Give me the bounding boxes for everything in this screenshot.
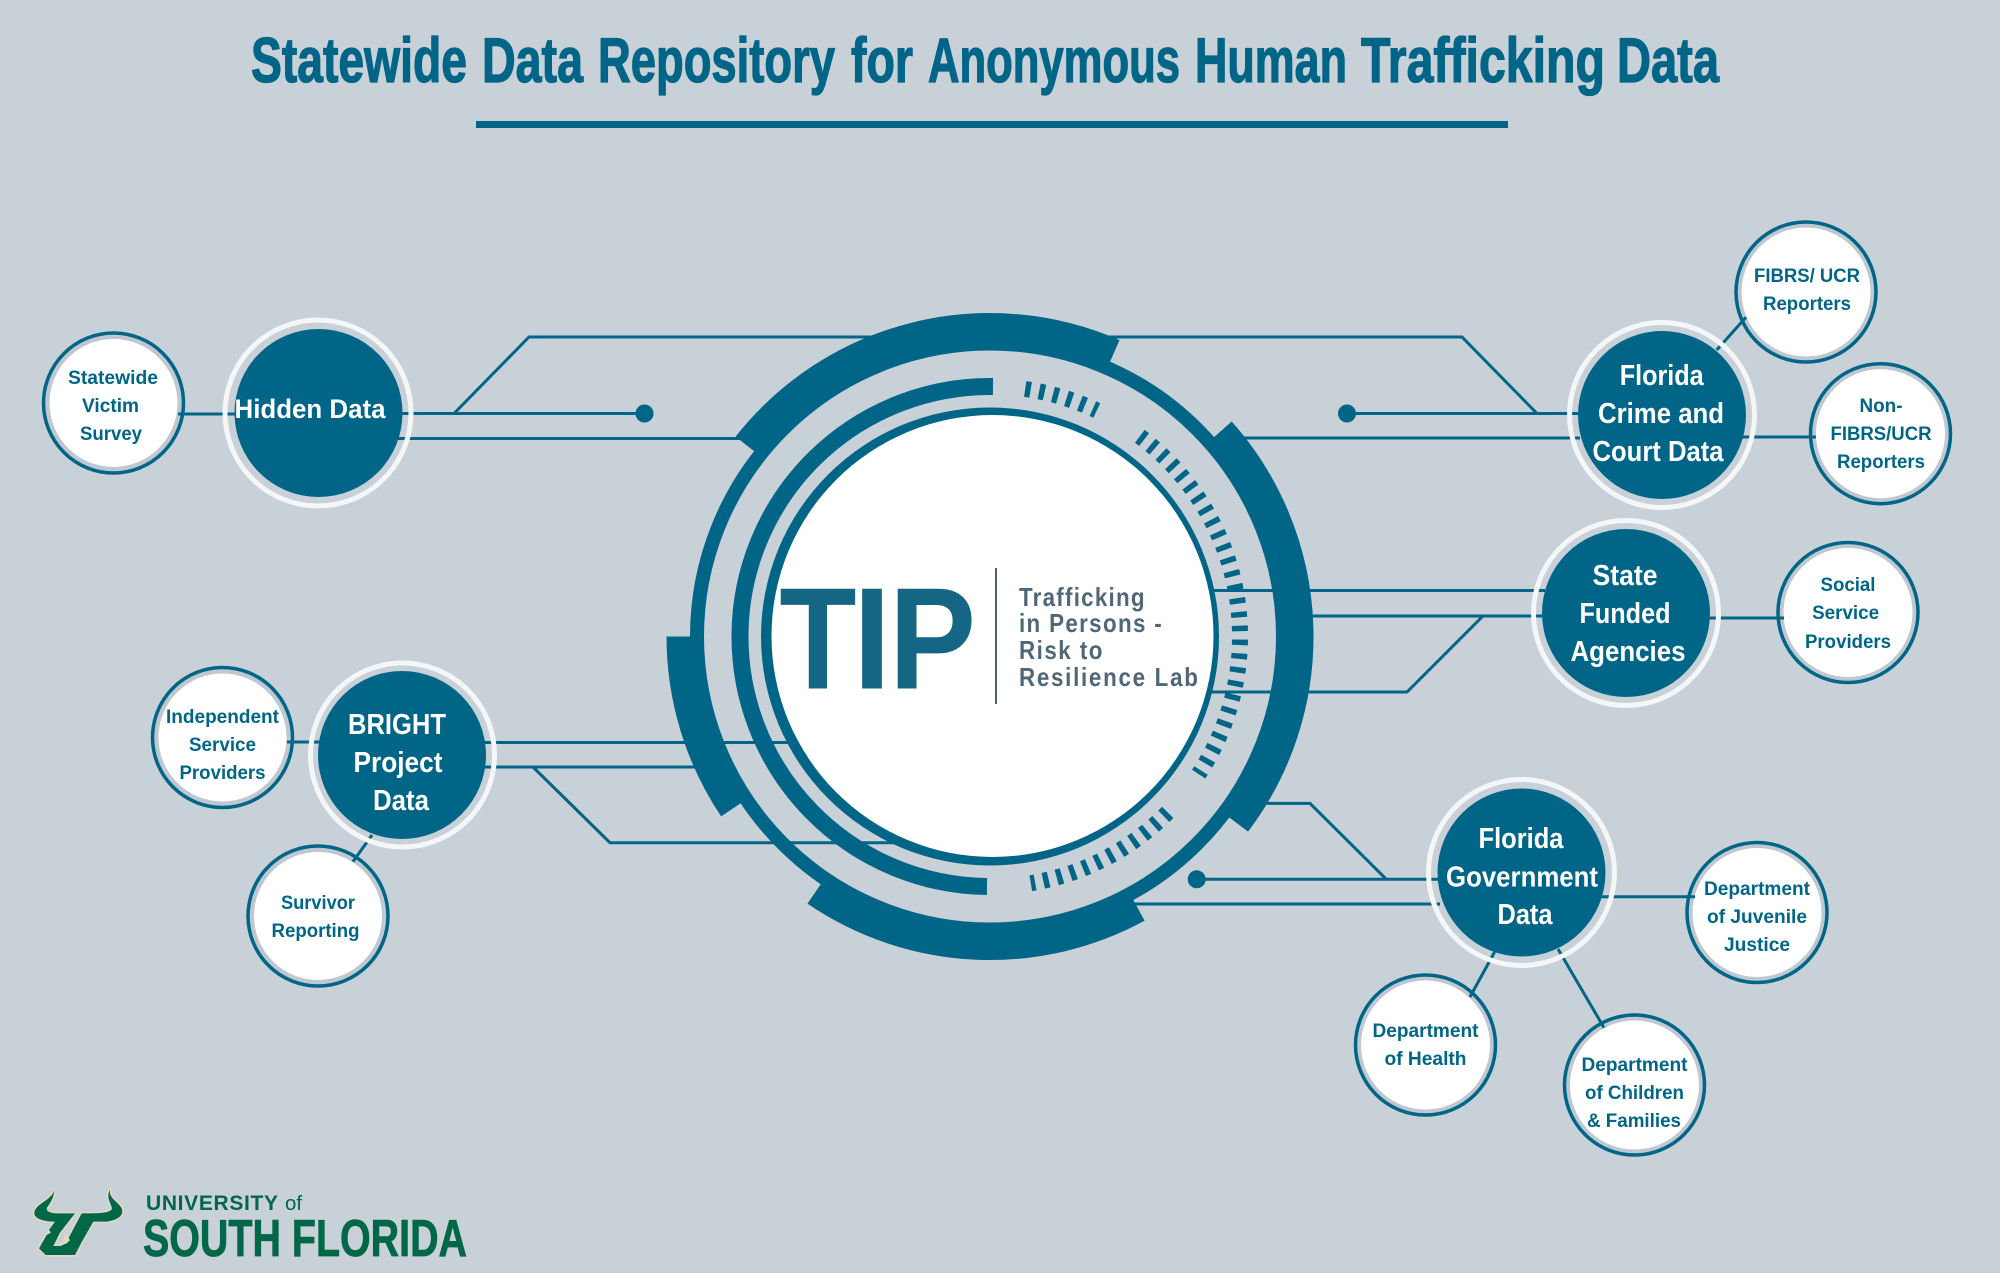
title: Anonymous	[928, 26, 1180, 96]
title: Statewide	[251, 26, 467, 96]
node: Social Service Providers: Providers	[1805, 631, 1891, 653]
node: Florida Crime and Court Data: Florida	[1620, 360, 1705, 392]
node: Survivor Reporting: Reporting	[272, 920, 360, 942]
node: BRIGHT Project Data: Data	[373, 785, 430, 817]
thick arc: right	[1220, 432, 1298, 822]
logo letters: T	[779, 558, 856, 720]
title: for	[851, 26, 913, 96]
node: Florida Government Data: Data	[1498, 899, 1554, 931]
inner ring	[761, 408, 1219, 866]
node: Department of Juvenile Justice: of Juvenile	[1707, 906, 1807, 928]
thick arc: top	[748, 328, 1113, 446]
title: Trafficking	[1361, 26, 1605, 96]
node: Department of Children & Families: Department	[1582, 1054, 1688, 1076]
node: Non-FIBRS/UCR Reporters: FIBRS/UCR	[1830, 423, 1932, 445]
node: BRIGHT Project Data	[310, 663, 494, 847]
node: Independent Service Providers	[152, 668, 292, 808]
connector: Department of Juvenile Justice	[1600, 895, 1695, 898]
node: State Funded Agencies: State	[1592, 560, 1658, 592]
USF logo	[34, 1189, 467, 1268]
node: Survivor Reporting	[248, 846, 388, 986]
node: FIBRS/ UCR Reporters: Reporters	[1763, 293, 1851, 315]
central dial	[682, 328, 1298, 945]
node: Florida Government Data	[1428, 780, 1614, 966]
node: Hidden Data: Hidden Data	[234, 394, 386, 424]
node: Florida Crime and Court Data: Crime and	[1598, 398, 1724, 430]
node: Independent Service Providers: Service	[189, 734, 256, 756]
logo letters	[779, 558, 976, 720]
connector: Social Service Providers	[1705, 616, 1784, 620]
logo wordmark	[143, 1192, 467, 1268]
node: Florida Crime and Court Data	[1570, 322, 1754, 508]
node: Florida Government Data: Florida	[1478, 823, 1565, 855]
title	[251, 26, 1720, 96]
node: BRIGHT Project Data: BRIGHT	[348, 709, 447, 741]
node: Social Service Providers	[1778, 542, 1918, 682]
logo text	[1019, 583, 1198, 692]
connector: Department of Children & Families	[1558, 949, 1604, 1028]
node: Department of Children & Families: & Families	[1587, 1110, 1681, 1132]
node: State Funded Agencies	[1534, 520, 1718, 706]
connector end dot bottom	[1188, 870, 1206, 888]
logo letters: P	[889, 558, 976, 720]
logo text: Resilience Lab	[1019, 663, 1198, 692]
node: State Funded Agencies: Funded	[1580, 598, 1670, 630]
node: Statewide Victim Survey: Survey	[80, 423, 142, 445]
node: Statewide Victim Survey: Victim	[82, 395, 139, 417]
node: Department of Health	[1356, 975, 1496, 1115]
node: Non-FIBRS/UCR Reporters: Reporters	[1837, 451, 1925, 473]
node: Non-FIBRS/UCR Reporters	[1810, 364, 1950, 504]
node: Department of Juvenile Justice: Department	[1704, 878, 1810, 900]
node: Department of Juvenile Justice: Justice	[1724, 934, 1790, 956]
logo text: in Persons -	[1019, 609, 1162, 638]
title underline	[476, 121, 1508, 128]
connector end dot left	[636, 404, 654, 422]
node: Independent Service Providers: Independent	[166, 706, 279, 728]
node: Florida Government Data: Government	[1446, 862, 1598, 894]
white centre disc	[772, 415, 1214, 857]
logo text: Trafficking	[1019, 583, 1145, 612]
tick marks: right	[1140, 436, 1240, 774]
logo text: Risk to	[1019, 636, 1102, 665]
logo letters: I	[853, 558, 891, 720]
connector: Independent Service Providers	[287, 740, 322, 744]
node: Florida Crime and Court Data: Court Data	[1592, 436, 1725, 468]
node: Independent Service Providers: Providers	[180, 762, 266, 784]
logo divider	[995, 568, 997, 704]
TIP logo	[779, 558, 1198, 720]
node: Social Service Providers: Social	[1820, 574, 1876, 596]
node: Department of Children & Families: of Children	[1585, 1082, 1684, 1104]
tick marks: bottom	[1031, 812, 1168, 883]
tick marks: top	[1025, 389, 1097, 410]
connector: Non-FIBRS/UCR Reporters	[1740, 436, 1816, 438]
node: Social Service Providers: Service	[1812, 602, 1879, 624]
node: Department of Health: of Health	[1384, 1048, 1466, 1070]
node: Department of Health: Department	[1372, 1020, 1479, 1042]
title: Data	[1617, 26, 1720, 96]
title: Repository	[598, 26, 835, 96]
connector: Survivor Reporting	[353, 835, 372, 862]
node: Department of Juvenile Justice	[1687, 842, 1827, 982]
node: FIBRS/ UCR Reporters: FIBRS/ UCR	[1754, 265, 1860, 287]
connector: Department of Health	[1470, 952, 1495, 997]
connector end dot right	[1338, 404, 1356, 422]
circuit connector lines	[398, 337, 1580, 904]
connector: FIBRS/ UCR Reporters	[1717, 317, 1746, 350]
title: Data	[482, 26, 584, 96]
node: FIBRS/ UCR Reporters	[1736, 222, 1876, 362]
logo wordmark: SOUTH FLORIDA	[143, 1210, 467, 1268]
logo wordmark: UNIVERSITY	[146, 1192, 278, 1215]
icon: USF bull	[34, 1189, 122, 1255]
node: State Funded Agencies: Agencies	[1570, 636, 1686, 668]
node: Hidden Data	[225, 320, 411, 506]
node: Statewide Victim Survey	[44, 333, 184, 473]
thick arc: bottom	[816, 891, 1137, 945]
node: Non-FIBRS/UCR Reporters: Non-	[1860, 395, 1902, 417]
logo wordmark: of	[285, 1193, 302, 1215]
connector: Statewide Victim Survey	[178, 412, 240, 416]
node: Statewide Victim Survey: Statewide	[68, 367, 158, 389]
node: BRIGHT Project Data: Project	[354, 747, 443, 779]
inner arc: left half	[740, 386, 993, 886]
title: Human	[1195, 26, 1347, 96]
node: Survivor Reporting: Survivor	[281, 892, 355, 914]
thick arc: left	[682, 636, 734, 808]
node: Department of Children & Families	[1564, 1015, 1704, 1155]
